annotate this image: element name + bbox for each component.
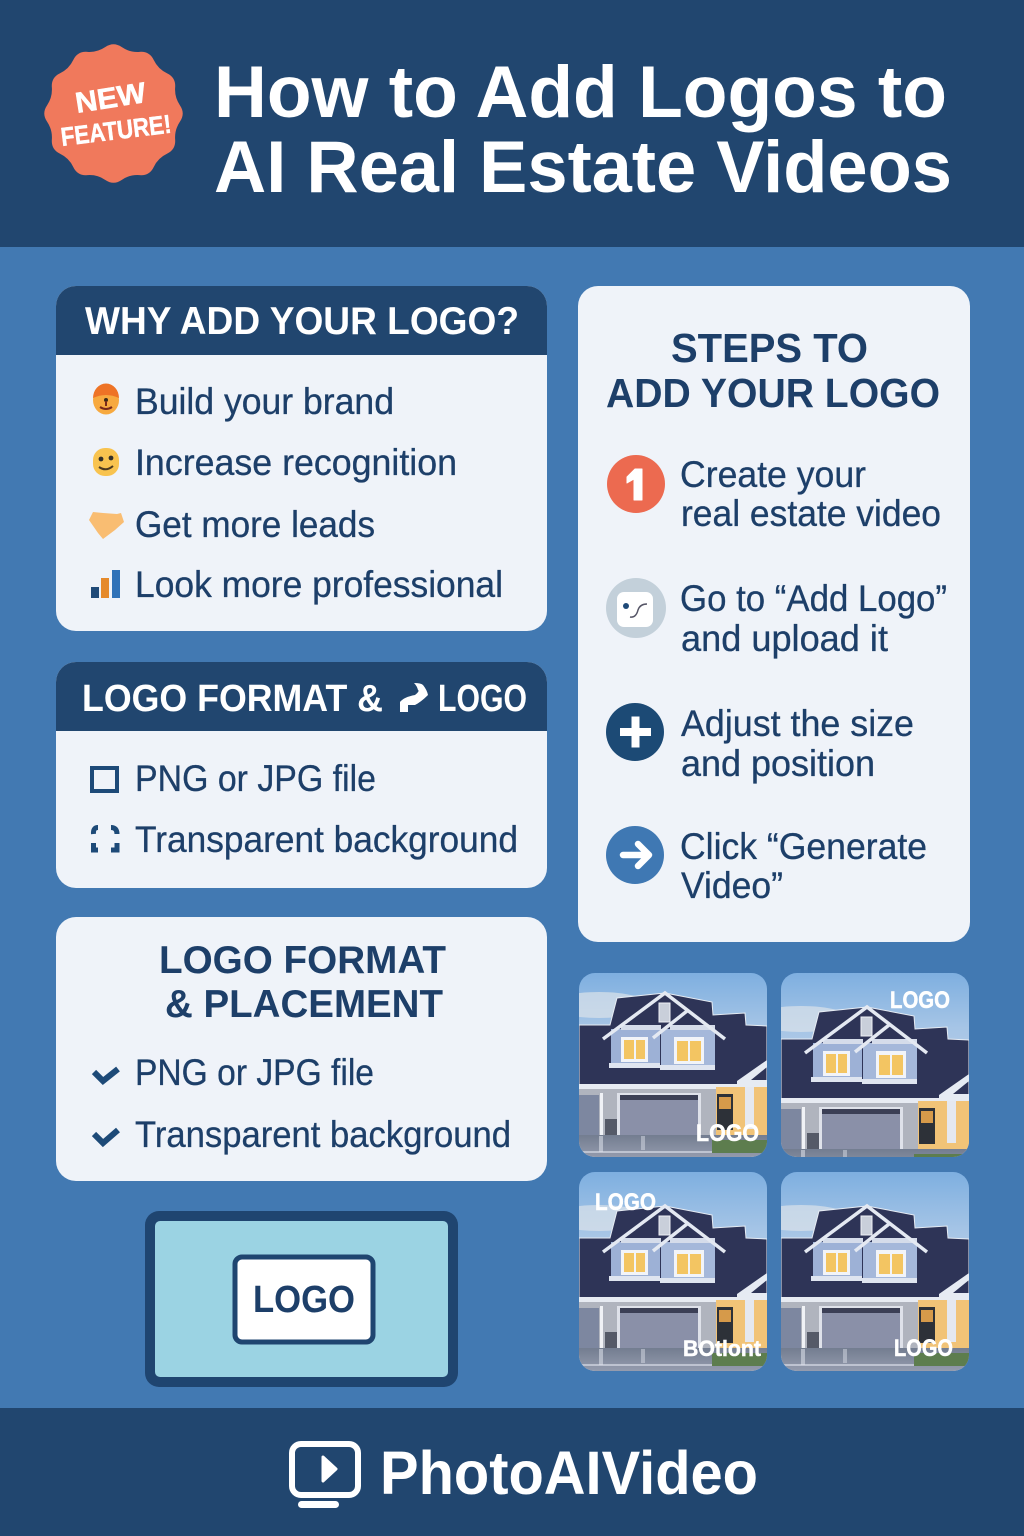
video thumbnail: logo lower right: LOGO [894,1335,953,1362]
heading: logo format and placement [159,939,446,1026]
logo placeholder screen [145,1211,458,1387]
footer band [0,1408,1024,1536]
step 1 text: Create your [680,454,866,495]
text: build your brand: Build your brand [135,381,394,422]
video thumbnail: logo top left: BOtlont [683,1336,762,1361]
title [214,52,952,208]
step 3 text [681,703,914,784]
video thumbnail: logo top right [781,973,969,1157]
step 2 text: Go to “Add Logo” [680,578,947,619]
text: transparent background: Transparent background [135,819,518,860]
panel: why add your logo [56,286,547,631]
title: How to Add Logos to [214,52,947,133]
text: look more professional: Look more professional [135,564,503,605]
icon: square [92,768,117,791]
step 4 text [680,826,927,906]
step 4 text: Click “Generate [680,826,927,867]
badge: new feature [44,44,183,183]
icon: orange face [93,384,119,414]
icon: bar chart [91,570,120,598]
video thumbnail: logo lower right [781,1172,969,1371]
logo placeholder screen: LOGO [253,1279,355,1321]
badge: new feature: NEW [73,77,149,120]
title: AI Real Estate Videos [214,127,952,208]
text: png or jpg file: PNG or JPG file [135,758,376,799]
icon: video screen [292,1444,358,1508]
text: get more leads: Get more leads [135,504,375,545]
step 4 text: Video” [681,865,783,906]
heading: logo format and logo: LOGO [438,678,527,720]
step 3 icon: plus [606,703,664,761]
video thumbnail: logo bottom right: LOGO [696,1120,759,1147]
heading: logo format and logo: LOGO FORMAT & [82,678,383,720]
panel: steps to add your logo [578,286,970,942]
video thumbnail: logo top left: LOGO [595,1189,656,1216]
icon: handshake [89,512,124,539]
heading: steps: ADD YOUR LOGO [606,370,940,416]
step 3 text: Adjust the size [681,703,914,744]
step 2 icon: upload window [606,578,666,638]
icon: transparent corners [93,828,117,850]
heading: steps [606,325,940,416]
video thumbnail: logo top right: LOGO [890,987,950,1014]
brand name: PhotoAIVideo [380,1439,758,1507]
step 1 text [680,454,941,534]
heading: why add your logo: WHY ADD YOUR LOGO? [85,300,519,343]
text: increase recognition: Increase recognition [135,442,457,483]
step 2 text: and upload it [681,618,889,659]
text: transparent background: Transparent background [135,1114,511,1155]
heading: logo format and placement: & PLACEMENT [165,983,443,1026]
video thumbnail: logo bottom right [579,973,767,1157]
video thumbnail: logo top left [579,1172,767,1371]
step 1 text: real estate video [681,493,941,534]
panel: logo format and logo [56,662,547,888]
icon: check [94,1130,118,1143]
text: png or jpg file: PNG or JPG file [135,1052,374,1093]
panel: logo format and placement [56,917,547,1181]
heading: logo format and placement: LOGO FORMAT [159,939,446,982]
badge: new feature: FEATURE! [59,109,173,152]
step 2 text [680,578,947,659]
step 1 icon: number one [607,455,665,513]
step 4 icon: arrow [606,826,664,884]
header band [0,0,1024,247]
icon: check [94,1069,118,1081]
heading: steps: STEPS TO [671,325,868,371]
icon: smiley [93,448,119,476]
step 3 text: and position [681,743,875,784]
